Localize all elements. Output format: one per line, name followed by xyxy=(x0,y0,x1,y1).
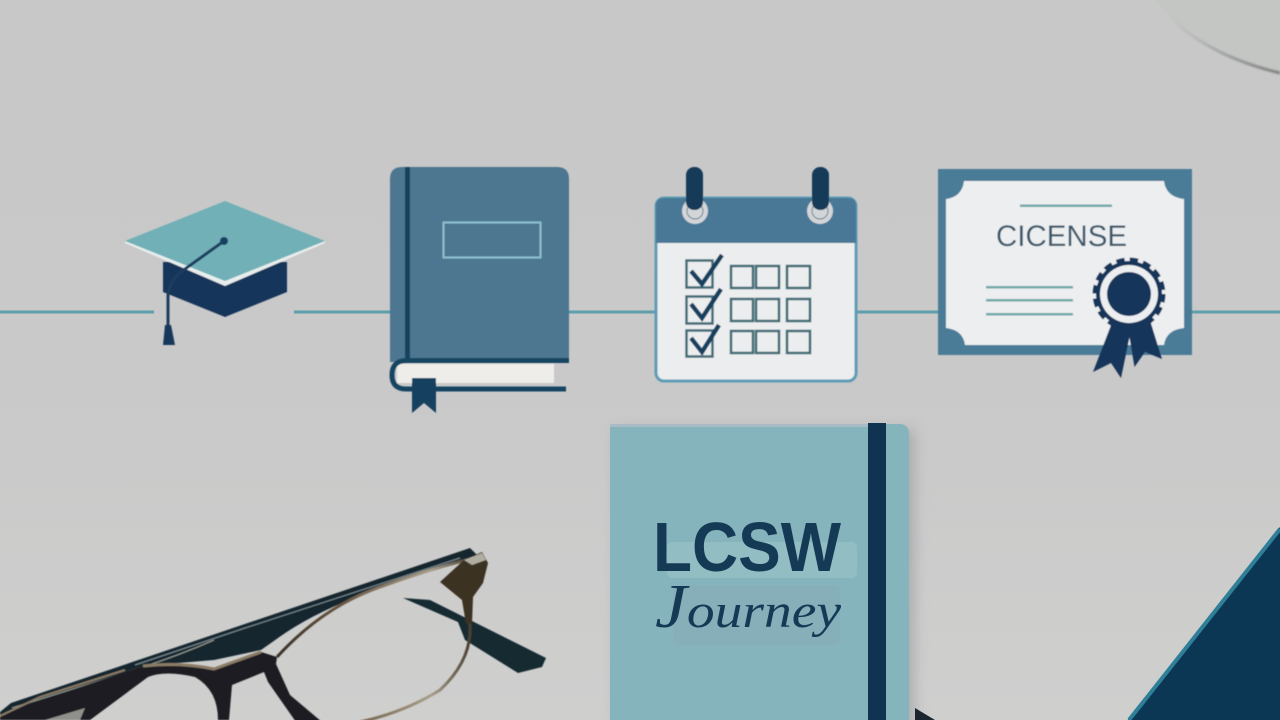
timeline line xyxy=(0,310,1280,314)
elastic band xyxy=(868,423,886,720)
mug corner xyxy=(1155,0,1280,73)
notebook title: LCSW xyxy=(653,508,841,586)
notebook xyxy=(610,423,935,720)
icon: graduation cap xyxy=(125,201,325,345)
certificate title: CICENSE xyxy=(996,220,1127,253)
icon: calendar xyxy=(656,167,856,381)
calendar check marks xyxy=(691,255,722,352)
nose pad xyxy=(45,708,85,720)
calendar checkboxes xyxy=(686,260,810,356)
ribbon seal xyxy=(1093,261,1162,378)
notebook subtitle: Journey xyxy=(655,573,842,641)
hinge xyxy=(440,552,488,624)
bridge and nose pads xyxy=(0,652,322,720)
icon: license certificate xyxy=(938,169,1192,378)
dark folder corner xyxy=(1128,527,1280,720)
right lens rim xyxy=(277,560,470,720)
near temple arm xyxy=(0,548,478,720)
calendar rings xyxy=(682,167,833,224)
glasses xyxy=(0,548,546,720)
far temple arm xyxy=(403,598,546,673)
icon: book xyxy=(390,167,569,413)
